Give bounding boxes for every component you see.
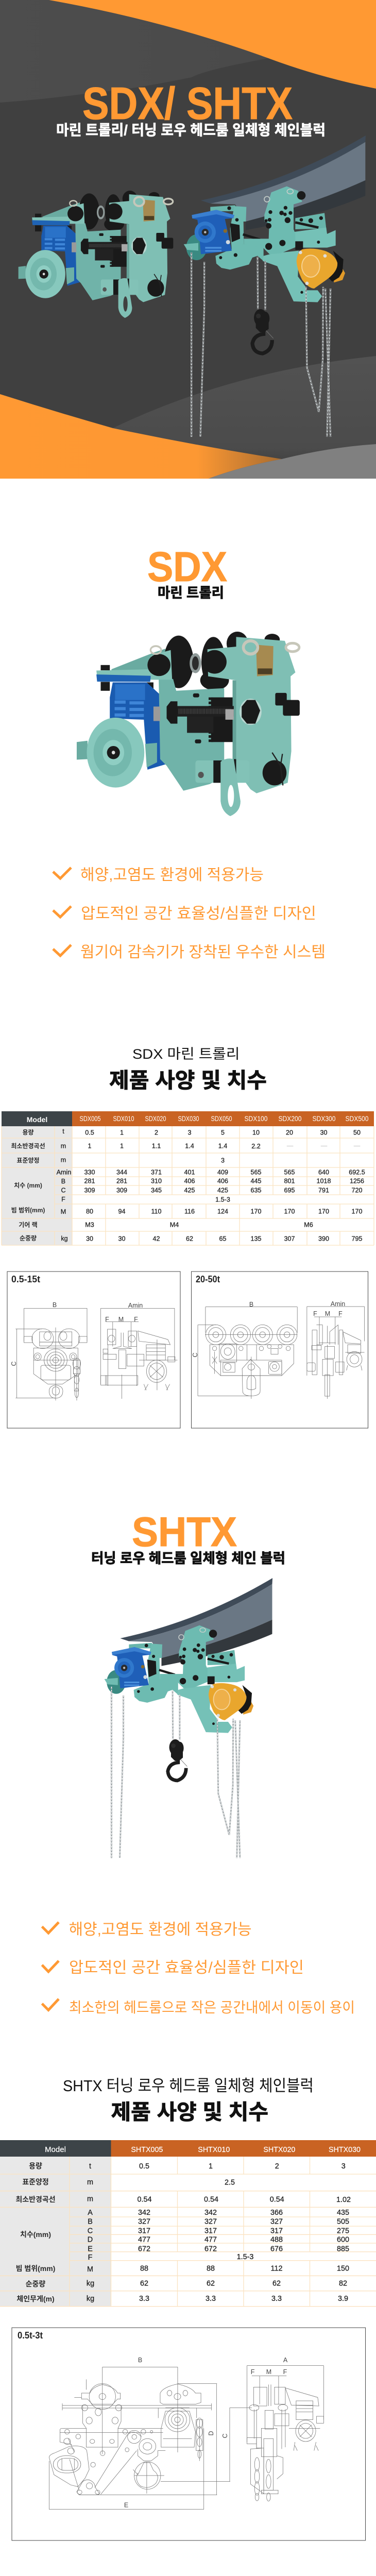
row: dimensions: 344 <box>116 1168 127 1176</box>
row: dimensions: B <box>88 2218 93 2226</box>
section: SDX heading: SDX <box>147 544 227 590</box>
table header <box>27 1114 369 1124</box>
gray swoosh: bottom right <box>209 444 376 479</box>
row: chain weight: 3.3 <box>271 2295 282 2303</box>
row: minimum radius: — <box>287 1142 294 1149</box>
row: gear rack: M4 <box>170 1221 179 1228</box>
row: dimensions: 317 <box>204 2227 217 2235</box>
row: beam range: 170 <box>250 1208 262 1215</box>
row: minimum radius: — <box>321 1142 328 1149</box>
row: minimum radius: m <box>61 1143 66 1150</box>
row: net weight: 62 <box>140 2280 148 2288</box>
row: dimensions: 281 <box>116 1178 127 1185</box>
hero subtitle: 마린 트롤리/ 터닝 로우 헤드룸 일체형 체인블럭 <box>56 122 326 138</box>
row: minimum radius: m <box>87 2195 93 2203</box>
table header: Model <box>45 2145 66 2154</box>
row: beam range: 빔 범위(mm) <box>16 2264 55 2273</box>
row: net weight: 307 <box>284 1235 295 1243</box>
row: minimum radius: 0.54 <box>204 2196 218 2204</box>
row: capacity <box>29 2162 346 2171</box>
technical drawing <box>198 1307 365 1399</box>
row: dimensions: 445 <box>250 1178 262 1185</box>
dimension labels: F <box>283 2368 287 2376</box>
row: gear rack: M6 <box>304 1221 313 1228</box>
row: net weight: 62 <box>272 2280 281 2288</box>
dimension labels: Amin <box>128 1302 143 1309</box>
row: standard lift <box>16 1156 225 1164</box>
panel title: 0.5-15t <box>11 1274 40 1284</box>
row: dimensions: 885 <box>337 2245 349 2253</box>
row: capacity: 3 <box>187 1129 192 1137</box>
table header: SDX020 <box>145 1114 166 1123</box>
dimension labels: B <box>138 2357 142 2364</box>
row: dimensions: 309 <box>116 1187 127 1194</box>
row: dimensions: 695 <box>284 1187 295 1194</box>
row: dimensions: 720 <box>351 1187 363 1194</box>
dimension labels: B <box>53 1301 57 1309</box>
dimension labels <box>192 1300 345 1358</box>
row: net weight: 62 <box>207 2280 215 2288</box>
SHTX spec table <box>0 2140 376 2307</box>
row: chain weight: kg <box>87 2295 94 2303</box>
row: net weight <box>26 2280 347 2288</box>
row: capacity: 1 <box>120 1129 124 1137</box>
row: beam range: 170 <box>318 1208 329 1215</box>
dimension labels: M <box>325 1310 330 1317</box>
row: beam range: 124 <box>217 1208 228 1215</box>
panel title: 0.5t-3t <box>18 2330 43 2341</box>
row: minimum radius <box>11 1142 361 1150</box>
row: beam range: 88 <box>207 2265 215 2273</box>
row: net weight: 65 <box>219 1235 227 1243</box>
drawing panel: 0.5t-3t <box>12 2328 366 2540</box>
row: dimensions: 409 <box>217 1168 228 1176</box>
row: capacity: 용량 <box>22 1129 34 1136</box>
row: dimensions: 505 <box>337 2218 349 2226</box>
row: dimensions: 342 <box>138 2209 150 2217</box>
panel title: 20-50t <box>196 1274 220 1284</box>
row: dimensions: 317 <box>138 2227 150 2235</box>
row: net weight <box>20 1234 363 1243</box>
row: net weight: kg <box>61 1235 68 1242</box>
row: dimensions: 640 <box>318 1168 329 1176</box>
dimension labels: Amin <box>331 1300 345 1308</box>
row: beam range: 88 <box>140 2265 148 2273</box>
row: dimensions: 401 <box>184 1168 195 1176</box>
row: capacity: 2 <box>275 2162 279 2171</box>
row: capacity: 1 <box>209 2162 213 2171</box>
SHTX feature list <box>42 1921 355 2015</box>
row: minimum radius: — <box>354 1142 361 1149</box>
row: chain weight <box>16 2295 348 2303</box>
row: gear rack: 기어 랙 <box>19 1221 38 1228</box>
feature text: 압도적인 공간 효율성/심플한 디자인 <box>69 1959 304 1976</box>
dimension labels: F <box>251 2368 255 2376</box>
row: beam range: 150 <box>337 2265 349 2273</box>
row: dimensions: 366 <box>270 2209 283 2217</box>
row: dimensions: 327 <box>270 2218 283 2226</box>
row: dimensions: 310 <box>151 1178 162 1185</box>
row: minimum radius: 1.4 <box>218 1143 227 1150</box>
SHTX spec heading: SHTX 터닝 로우 헤드룸 일체형 체인블럭 <box>63 2077 314 2095</box>
section: SHTX heading: 터닝 로우 헤드룸 일체형 체인 블럭 <box>91 1551 285 1566</box>
row: beam range: 170 <box>284 1208 295 1215</box>
SDX spec heading: SDX 마린 트롤리 <box>132 1046 240 1062</box>
row: standard lift <box>22 2178 235 2187</box>
dimension labels: M <box>118 1316 124 1323</box>
row: dimensions: B <box>61 1178 65 1185</box>
icon: check <box>42 1922 59 1933</box>
table header: SDX030 <box>178 1114 199 1123</box>
row: dimensions: 342 <box>204 2209 217 2217</box>
SDX spec heading <box>109 1046 267 1092</box>
row: dimensions: C <box>61 1187 66 1194</box>
row: gear rack <box>19 1221 313 1228</box>
section: SHTX heading <box>91 1509 285 1566</box>
row: capacity: 2 <box>155 1129 158 1137</box>
row: beam range: 170 <box>351 1208 363 1215</box>
icon: check <box>42 1999 59 2010</box>
row: net weight: kg <box>87 2280 94 2288</box>
row: beam range: M <box>87 2265 93 2274</box>
row: net weight: 42 <box>152 1235 160 1243</box>
drawing panel: 20-50t <box>192 1272 368 1428</box>
row: dimensions: F <box>61 1196 65 1203</box>
row: net weight: 82 <box>339 2280 347 2288</box>
row: capacity: t <box>89 2162 91 2171</box>
row: beam range: M <box>61 1208 66 1215</box>
row: beam range <box>16 2264 349 2274</box>
row: net weight: 30 <box>118 1235 126 1243</box>
row: minimum radius: 최소반경곡선 <box>15 2195 56 2204</box>
icon: check <box>53 945 71 956</box>
row: dimensions: 281 <box>84 1178 95 1185</box>
dimension labels: F <box>105 1316 109 1323</box>
row: dimensions: 치수 (mm) <box>14 1182 42 1189</box>
orange swoosh: top right <box>49 0 376 89</box>
row: chain weight: 3.3 <box>139 2295 149 2303</box>
dimension labels: D <box>208 2431 215 2436</box>
row: dimensions: 327 <box>138 2218 150 2226</box>
row: dimensions: 635 <box>250 1187 262 1194</box>
feature text: 압도적인 공간 효율성/심플한 디자인 <box>81 905 316 922</box>
dimension labels: C <box>10 1361 18 1366</box>
table header: SDX100 <box>244 1114 268 1123</box>
row: standard lift: m <box>61 1156 66 1163</box>
row: dimensions: 425 <box>217 1187 228 1194</box>
row: dimensions: 309 <box>84 1187 95 1194</box>
row: minimum radius: 1.02 <box>336 2196 351 2204</box>
table header: SHTX030 <box>329 2145 361 2154</box>
row: dimensions <box>14 1168 365 1204</box>
row: dimensions: 406 <box>217 1178 228 1185</box>
row: net weight: 390 <box>318 1235 329 1243</box>
row: minimum radius: 1 <box>88 1143 92 1150</box>
SDX spec heading: 제품 사양 및 치수 <box>109 1069 267 1092</box>
section: SDX heading: 마린 트롤리 <box>158 585 224 601</box>
row: capacity: 30 <box>320 1129 328 1137</box>
row: dimensions: 1256 <box>350 1178 364 1185</box>
row: dimensions: E <box>88 2245 93 2253</box>
dimension labels: F <box>134 1316 138 1323</box>
row: dimensions: 345 <box>151 1187 162 1194</box>
dimension labels: B <box>249 1301 253 1308</box>
SHTX spec heading: 제품 사양 및 치수 <box>111 2100 268 2124</box>
icon: check <box>53 906 71 917</box>
row: dimensions: 801 <box>284 1178 295 1185</box>
row: minimum radius: 2.2 <box>251 1143 261 1150</box>
row: standard lift: m <box>87 2178 93 2187</box>
row: dimensions: 676 <box>270 2245 283 2253</box>
section: SHTX heading: SHTX <box>132 1509 237 1555</box>
feature text: 해양,고염도 환경에 적용가능 <box>80 867 264 884</box>
row: standard lift: 표준양정 <box>22 2178 49 2186</box>
drawing panel: 0.5-15t <box>7 1272 180 1428</box>
row: dimensions: D <box>88 2236 93 2244</box>
dimension labels: E <box>124 2502 128 2509</box>
row: capacity: 3 <box>341 2162 346 2171</box>
row: net weight: 135 <box>250 1235 262 1243</box>
table header: SDX050 <box>211 1114 232 1123</box>
icon: check <box>53 868 71 878</box>
row: dimensions: C <box>88 2227 93 2235</box>
row: dimensions: 692.5 <box>349 1168 365 1176</box>
row: dimensions: 371 <box>151 1168 162 1176</box>
table header: SDX500 <box>345 1114 369 1123</box>
dimension labels: C <box>192 1352 199 1358</box>
row: dimensions: 330 <box>84 1168 95 1176</box>
row: net weight: 62 <box>186 1235 193 1243</box>
table header: Model <box>27 1115 47 1124</box>
table header: SDX200 <box>278 1114 302 1123</box>
row: dimensions: 565 <box>250 1168 262 1176</box>
row: dimensions: 327 <box>204 2218 217 2226</box>
orange swoosh: bottom left <box>0 394 282 479</box>
row: gear rack: M3 <box>85 1221 94 1228</box>
row: dimensions: 488 <box>270 2236 283 2244</box>
row: net weight: 순중량 <box>20 1234 37 1242</box>
row: dimensions: 477 <box>204 2236 217 2244</box>
row: net weight: 795 <box>351 1235 363 1243</box>
table header: SDX300 <box>312 1114 336 1123</box>
row: chain weight: 체인무게(m) <box>16 2295 55 2303</box>
row: minimum radius: 0.54 <box>270 2196 284 2204</box>
dimension labels: C <box>221 2433 229 2438</box>
SDX feature list <box>53 867 326 961</box>
table header: SDX005 <box>79 1114 101 1123</box>
row: capacity: 10 <box>252 1129 260 1137</box>
technical drawing <box>15 1308 177 1400</box>
row: beam range: 116 <box>184 1208 195 1215</box>
row: net weight: 30 <box>86 1235 93 1243</box>
row: dimensions: 477 <box>138 2236 150 2244</box>
row: chain weight: 3.3 <box>206 2295 216 2303</box>
row: standard lift: 표준양정 <box>16 1157 40 1164</box>
row: capacity <box>22 1128 361 1137</box>
row: standard lift: 2.5 <box>225 2178 235 2187</box>
row: minimum radius: 0.54 <box>137 2196 152 2204</box>
dimension labels <box>10 1301 143 1366</box>
row: beam range <box>11 1207 363 1215</box>
feature text: 최소한의 헤드룸으로 작은 공간내에서 이동이 용이 <box>69 1999 355 2015</box>
row: dimensions: 672 <box>204 2245 217 2253</box>
row: capacity: 20 <box>286 1129 293 1137</box>
row: beam range: 빔 범위(mm) <box>11 1207 45 1214</box>
row: dimensions: 1018 <box>316 1178 331 1185</box>
table header: SHTX010 <box>198 2145 230 2154</box>
table header: SHTX020 <box>263 2145 295 2154</box>
photo: SDX marine trolley <box>77 632 300 816</box>
row: dimensions: Amin <box>57 1168 71 1176</box>
row: dimensions: 425 <box>184 1187 195 1194</box>
row: dimensions: 275 <box>337 2227 349 2235</box>
feature text: 해양,고염도 환경에 적용가능 <box>69 1921 252 1938</box>
row: beam range: 110 <box>151 1208 162 1215</box>
row: minimum radius: 최소반경곡선 <box>11 1143 45 1150</box>
row: dimensions: 1.5-3 <box>237 2253 253 2261</box>
row: dimensions: 791 <box>318 1187 329 1194</box>
table header: SDX010 <box>113 1114 134 1123</box>
SDX spec table <box>2 1111 374 1245</box>
row: minimum radius: 1 <box>120 1143 124 1150</box>
row: dimensions: 치수(mm) <box>20 2230 51 2239</box>
SHTX spec heading <box>63 2077 314 2124</box>
row: capacity: 50 <box>353 1129 361 1137</box>
dimension labels: M <box>266 2368 271 2376</box>
row: chain weight: 3.9 <box>338 2295 348 2303</box>
row: dimensions: F <box>88 2253 93 2262</box>
row: net weight: 순중량 <box>26 2280 45 2288</box>
photo: SHTX low headroom block <box>105 1578 272 1858</box>
row: dimensions: 406 <box>184 1178 195 1185</box>
dimension labels: A <box>283 2357 288 2364</box>
row: capacity: 5 <box>221 1129 225 1137</box>
row: beam range: 94 <box>118 1208 126 1215</box>
row: dimensions: 317 <box>270 2227 283 2235</box>
photo: SHTX low headroom block on hero <box>184 135 366 437</box>
technical drawing <box>49 2366 323 2510</box>
row: minimum radius: 1.4 <box>185 1143 194 1150</box>
row: capacity: t <box>62 1128 64 1135</box>
photo: SDX trolley on hero <box>19 191 173 318</box>
row: minimum radius: 1.1 <box>152 1143 161 1150</box>
row: dimensions: 672 <box>138 2245 150 2253</box>
row: beam range: 112 <box>271 2265 282 2273</box>
row: dimensions: 565 <box>284 1168 295 1176</box>
row: dimensions: 600 <box>337 2236 349 2244</box>
row: capacity: 0.5 <box>139 2162 149 2171</box>
hero banner <box>0 0 376 479</box>
row: capacity: 0.5 <box>85 1129 94 1137</box>
table header <box>45 2145 361 2154</box>
icon: check <box>42 1961 59 1972</box>
row: dimensions: 1.5-3 <box>215 1196 230 1204</box>
table header: SHTX005 <box>131 2145 163 2154</box>
hero title: SDX/ SHTX <box>82 78 293 129</box>
row: capacity: 용량 <box>29 2162 42 2170</box>
row: dimensions <box>20 2209 349 2262</box>
row: dimensions: A <box>88 2209 93 2217</box>
dimension labels: F <box>338 1310 343 1317</box>
row: dimensions: 435 <box>337 2209 349 2217</box>
dimension labels: F <box>313 1310 317 1317</box>
feature text: 웜기어 감속기가 장착된 우수한 시스템 <box>80 944 326 961</box>
row: standard lift: 3 <box>221 1157 225 1164</box>
row: beam range: 80 <box>86 1208 93 1215</box>
row: minimum radius <box>15 2195 351 2204</box>
dimension labels <box>124 2357 288 2509</box>
